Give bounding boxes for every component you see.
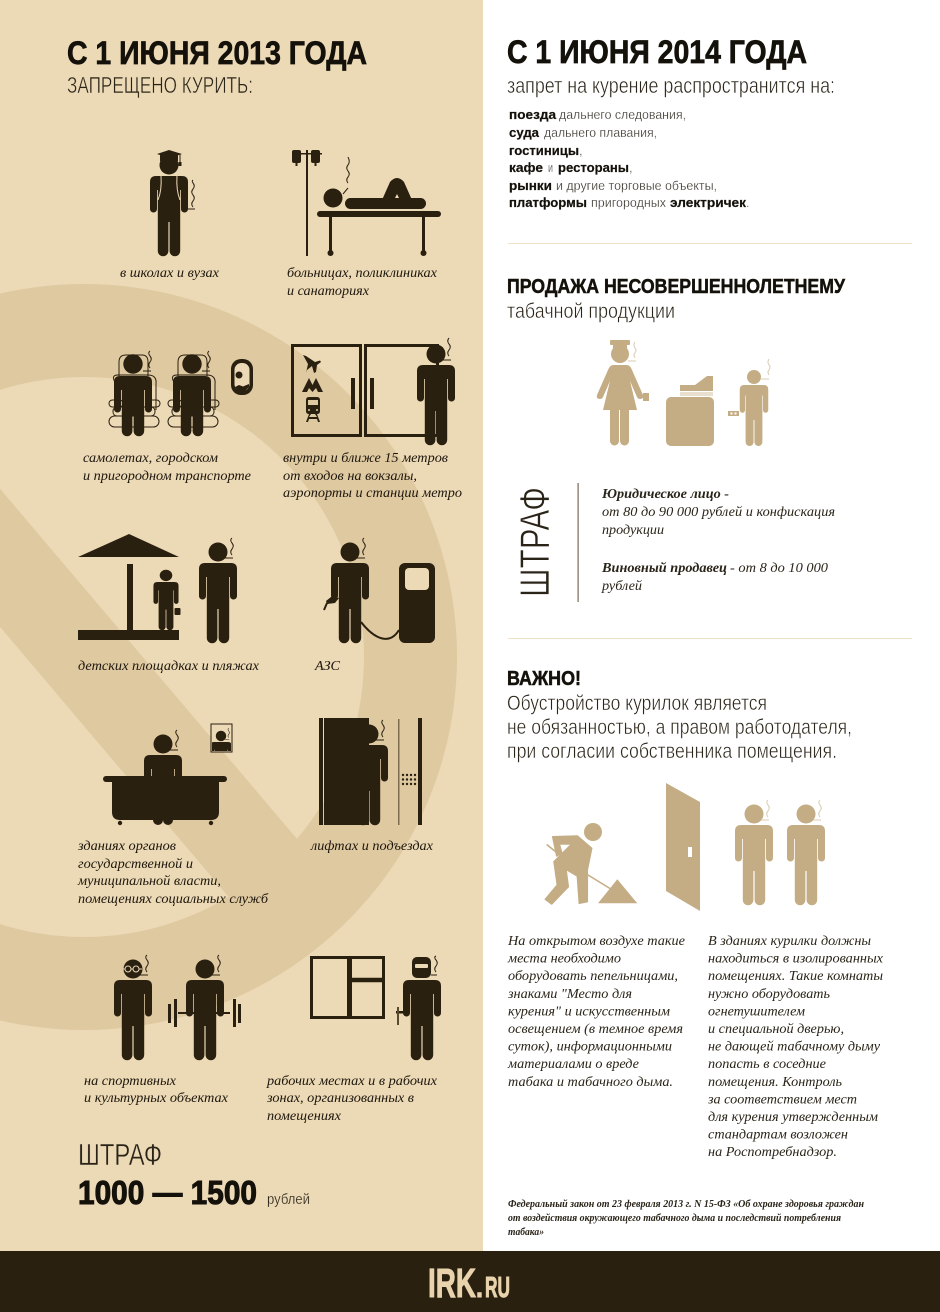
caption: government buildings: зданиях органов — [77, 838, 176, 853]
caption: gas stations: АЗС — [314, 658, 341, 673]
text column: outdoors — [507, 933, 685, 1089]
footnote: federal law — [508, 1199, 864, 1238]
list of places: рестораны — [558, 160, 629, 175]
fine details — [601, 486, 835, 593]
text column: indoors: помещениях. Такие комнаты — [708, 968, 883, 983]
lead text: при согласии собственника помещения. — [507, 740, 837, 763]
panel: 2013 ban — [67, 35, 462, 1211]
icon: student — [150, 150, 195, 256]
list of places: и другие торговые объекты, — [556, 178, 717, 193]
text column: indoors: помещения. Контроль — [708, 1074, 842, 1089]
list of places: электричек — [670, 195, 747, 210]
text column: outdoors: табака и табачного дыма. — [508, 1074, 673, 1089]
prohibition sign background — [0, 284, 457, 1030]
subheading: tobacco: табачной продукции — [507, 300, 675, 323]
icon: train — [306, 397, 320, 414]
icon: hospital — [292, 150, 441, 256]
panel: left background — [0, 0, 483, 1251]
panel: right background — [483, 0, 940, 1251]
caption: workplaces: зонах, организованных в — [266, 1090, 414, 1105]
heading: sale to minors: ПРОДАЖА НЕСОВЕРШЕННОЛЕТНЕМУ — [507, 275, 845, 298]
subheading: prohibited: ЗАПРЕЩЕНО КУРИТЬ: — [67, 72, 253, 98]
fine block: ШТРАФ — [78, 1137, 162, 1172]
list of places: гостиницы — [509, 143, 579, 158]
icon: two smokers — [735, 800, 825, 905]
list of places: дальнего следования, — [559, 107, 686, 122]
text column: indoors: стандартам возложен — [708, 1127, 848, 1142]
icon: gas station — [324, 538, 435, 643]
footer — [0, 1251, 940, 1312]
text column: indoors: не дающей табачному дыму — [708, 1039, 880, 1054]
caption: workplaces: помещениях — [267, 1108, 341, 1123]
footnote: federal law: Федеральный закон от 23 февраля 2013 г. N 15-ФЗ «Об охране здоровья граждан — [508, 1199, 864, 1210]
caption: government buildings — [77, 838, 269, 906]
caption: hospitals: больницах, поликлиниках — [287, 265, 437, 280]
text column: outdoors: места необходимо — [507, 951, 621, 966]
list of places: , — [629, 160, 633, 175]
heading: 2013: С 1 ИЮНЯ 2013 ГОДА — [67, 35, 367, 71]
text column: indoors: нужно оборудовать — [708, 986, 830, 1001]
caption: government buildings: государственной и — [78, 856, 193, 871]
caption: sports: и культурных объектах — [84, 1090, 228, 1105]
text column: outdoors: знаками "Место для — [507, 986, 632, 1001]
list of places: пригородных — [591, 195, 666, 210]
icon: digging worker — [545, 823, 637, 904]
list of places: . — [746, 195, 750, 210]
icon: station doors — [292, 338, 455, 445]
panel: 2014 ban — [507, 34, 835, 210]
fine details: Виновный продавец — [601, 560, 727, 575]
caption: stations: от входов на вокзалы, — [283, 468, 417, 483]
text column: outdoors: материалами о вреде — [507, 1056, 639, 1071]
heading: important: ВАЖНО! — [507, 668, 581, 690]
text column: indoors: находиться в изолированных — [708, 951, 883, 966]
caption: elevators: лифтах и подъездах — [310, 838, 433, 853]
lead text: Обустройство курилок является — [507, 692, 767, 715]
caption: stations: внутри и ближе 15 метров — [283, 450, 448, 465]
text column: outdoors: оборудовать пепельницами, — [508, 968, 678, 983]
text column: indoors: за соответствием мест — [707, 1091, 857, 1106]
text column: indoors: В зданиях курилки должны — [708, 933, 871, 948]
text column: outdoors: освещением (в темное время — [508, 1021, 683, 1036]
caption: transport: и пригородном транспорте — [83, 468, 251, 483]
panel: smoking rooms — [507, 668, 883, 1238]
fine block — [78, 1137, 310, 1211]
caption: stations — [283, 450, 462, 500]
text column: indoors: попасть в соседние — [708, 1056, 826, 1071]
fine details: Юридическое лицо - — [601, 486, 730, 501]
text column: indoors: и специальной дверью, — [708, 1021, 844, 1036]
list of places: рынки — [509, 178, 552, 193]
text column: outdoors: курения" и искусственным — [508, 1003, 670, 1018]
icon: door — [666, 783, 700, 911]
fine block: рублей — [267, 1191, 310, 1208]
caption: hospitals — [287, 265, 437, 298]
vertical label: fine: ШТРАФ — [511, 487, 558, 597]
text column: outdoors: суток), информационными — [508, 1039, 672, 1054]
footnote: federal law: от воздействия окружающего табачного дыма и последствий потребления — [508, 1213, 841, 1224]
caption: transport — [83, 450, 251, 483]
lead text — [507, 692, 852, 763]
text column: indoors: для курения утвержденным — [708, 1109, 878, 1124]
heading: 2014: С 1 ИЮНЯ 2014 ГОДА — [507, 34, 807, 70]
text column: indoors: на Роспотребнадзор. — [708, 1144, 837, 1159]
caption: schools: в школах и вузах — [120, 265, 219, 280]
fine details: от 80 до 90 000 рублей и конфискация — [602, 504, 835, 519]
caption: workplaces: рабочих местах и в рабочих — [266, 1073, 437, 1088]
icon: metro — [302, 378, 323, 392]
icon: saleswoman — [597, 340, 649, 446]
caption: workplaces — [266, 1073, 437, 1123]
subheading: ban extends: запрет на курение распространится на: — [507, 73, 835, 98]
logo: IRK.ru: RU — [485, 1272, 510, 1304]
text column: indoors: огнетушителем — [708, 1003, 805, 1018]
logo: IRK.ru: . — [476, 1272, 483, 1304]
caption: hospitals: и санаториях — [287, 283, 369, 298]
caption: government buildings: муниципальной власти, — [77, 873, 221, 888]
icon: office desk — [103, 724, 232, 825]
caption: government buildings: помещениях социальных служб — [78, 891, 269, 906]
fine block: 1000 — 1500 — [78, 1174, 257, 1211]
icon: spectator with glasses — [114, 955, 152, 1060]
list of places: суда — [509, 125, 540, 140]
icon: underage buyer — [728, 359, 770, 446]
text column: indoors — [707, 933, 883, 1159]
caption: playgrounds: детских площадках и пляжах — [78, 658, 259, 673]
footnote: federal law: табака» — [508, 1227, 544, 1238]
list of places: , — [579, 143, 583, 158]
list of places: поезда — [509, 107, 557, 122]
logo: IRK.ru: IRK — [428, 1260, 476, 1306]
list of places — [509, 107, 750, 210]
icon: plane — [303, 355, 321, 373]
icon: passengers in seats — [109, 351, 219, 436]
list of places: дальнего плавания, — [544, 125, 657, 140]
fine details: продукции — [602, 522, 664, 537]
icon: welder — [396, 956, 441, 1060]
icon: playground — [78, 534, 237, 643]
panel: sale to minors — [507, 275, 845, 602]
list of places: кафе — [509, 160, 543, 175]
caption: stations: аэропорты и станции метро — [283, 485, 462, 500]
icon: portrait — [210, 724, 232, 752]
caption: transport: самолетах, городском — [83, 450, 218, 465]
icon: elevator — [319, 718, 422, 825]
fine details: - от 8 до 10 000 — [730, 560, 828, 575]
list of places: и — [548, 160, 553, 175]
text column: outdoors: На открытом воздухе такие — [507, 933, 685, 948]
caption: sports — [84, 1073, 228, 1105]
list of places: платформы — [509, 195, 587, 210]
icon: cash counter — [666, 376, 714, 446]
lead text: не обязанностью, а правом работодателя, — [507, 716, 852, 739]
icon: weightlifter — [168, 955, 241, 1060]
icon: airplane window — [231, 359, 253, 395]
caption: sports: на спортивных — [84, 1073, 176, 1088]
fine details: рублей — [601, 578, 642, 593]
icon: window — [312, 957, 384, 1018]
